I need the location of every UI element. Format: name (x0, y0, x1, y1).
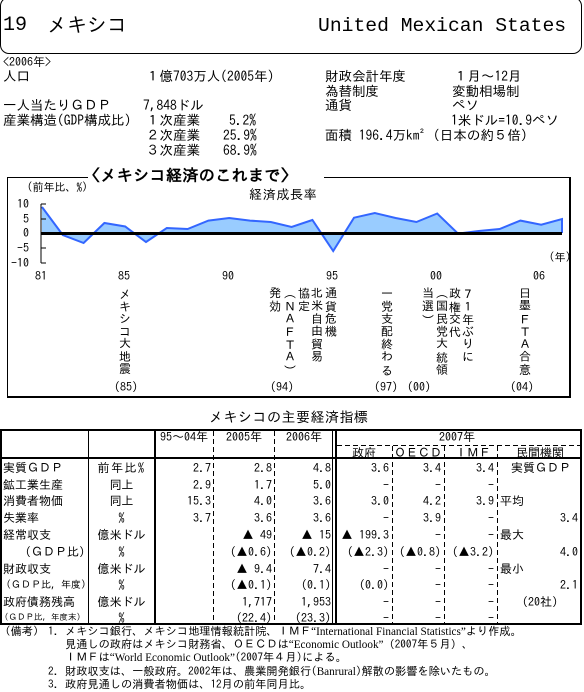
basic data block: 変動相場制 (452, 84, 520, 98)
event: 2000 change of government: ７１年ぶりに (462, 287, 474, 363)
row: real GDP: 3.6 (371, 462, 389, 474)
row: real GDP: 2.8 (254, 462, 272, 474)
footnotes: メキシコ銀行、メキシコ地理情報統計院、ＩＭＦ“International Financial Statistics”より作成。 (65, 626, 522, 638)
event: 2000 change of government: 政権交代 (449, 287, 461, 338)
table header: 2006年 (286, 431, 322, 443)
row: mining and manufacturing output: - (488, 479, 494, 491)
event: 2000 change of government (407, 287, 474, 393)
event: 2004 Japan-Mexico FTA: (04) (510, 381, 534, 393)
footnotes: 見通しの政府はメキシコ財務省、ＯＥＣＤは“Economic Outlook”（2007年５月）、 (65, 639, 473, 651)
row: government debt to GDP: (22.4) (236, 612, 272, 624)
footnotes: 財政収支は、一般政府。2002年は、農業開発銀行(Banrural)解散の影響を除いたもの。 (65, 666, 496, 678)
footnotes (5, 626, 522, 690)
row: government debt: 1,953 (301, 596, 331, 608)
row: unemployment: 3.6 (313, 512, 331, 524)
row: unemployment: 失業率 (3, 512, 39, 524)
currency: 通貨 (325, 98, 352, 112)
row: fiscal balance to GDP: (▲0.1) (230, 579, 272, 591)
industry structure: 産業構造(GDP構成比) (3, 113, 131, 127)
row: fiscal balance to GDP: 2.1 (560, 579, 578, 591)
row: real GDP: 前年比% (98, 462, 146, 474)
row: government debt to GDP (0, 612, 494, 624)
row: current account: ▲ 49 (242, 529, 272, 541)
exchange rate system: 為替制度 (325, 84, 379, 98)
title: English name: United Mexican States (318, 15, 566, 37)
row: consumer prices: 平均 (500, 495, 524, 507)
chart title: 経済成長率 (249, 188, 318, 201)
row: real GDP: 2.7 (193, 462, 211, 474)
row: government debt: - (488, 596, 494, 608)
row: government debt: 1,717 (242, 596, 272, 608)
event: 1994 peso crisis and NAFTA (269, 287, 337, 393)
event: 2000 change of government: (00) (407, 381, 431, 393)
row: current account to GDP: （ＧＤＰ比） (19, 546, 91, 558)
growth line (42, 207, 562, 251)
y axis labels: 0 (23, 227, 29, 239)
event: 2004 Japan-Mexico FTA (510, 287, 534, 393)
table header: 95〜04年 (160, 431, 208, 443)
footnotes: (備考) (5, 626, 39, 637)
x axis labels: 85 (118, 270, 130, 282)
row: government debt (3, 596, 558, 608)
row: fiscal balance to GDP: - (435, 579, 441, 591)
population: 人口 (3, 69, 30, 83)
row: fiscal balance to GDP (1, 579, 578, 591)
chart heading: 〈メキシコ経済のこれまで〉 (84, 167, 297, 183)
row: current account to GDP: (▲0.8) (399, 546, 441, 558)
event: 1997 end of one-party rule: 一党支配終わる (381, 287, 393, 376)
y axis (41, 204, 46, 263)
footnotes: 政府見通しの消費者物価は、12月の前年同月比。 (65, 679, 311, 690)
row: government debt: (20社) (522, 596, 558, 608)
row: fiscal balance to GDP: - (488, 579, 494, 591)
row: fiscal balance: 財政収支 (3, 563, 51, 575)
row: mining and manufacturing output: 5.0 (313, 479, 331, 491)
table header: 民間機関 (516, 447, 564, 459)
event: 2000 change of government: （国民党大統領 (436, 287, 448, 376)
table header: ＩＭＦ (455, 447, 491, 459)
row: government debt: 億米ドル (98, 596, 146, 608)
row: government debt: 政府債務残高 (3, 596, 75, 608)
event: 1985 earthquake: (85) (114, 381, 138, 393)
x axis labels: 90 (222, 270, 234, 282)
table header (160, 431, 564, 459)
row: government debt to GDP: (23.3) (295, 612, 331, 624)
basic data block: 68.9% (223, 143, 257, 157)
row: fiscal balance to GDP: (0.0) (359, 579, 389, 591)
row: mining and manufacturing output: - (383, 479, 389, 491)
row: consumer prices: 3.6 (313, 495, 331, 507)
row: current account to GDP: % (118, 546, 124, 558)
title: country number: 19 (3, 14, 27, 37)
footnotes: ＩＭＦは“World Economic Outlook”(2007年４月)による。 (65, 652, 347, 664)
row: fiscal balance to GDP: （ＧＤＰ比, 年度） (1, 580, 91, 590)
basic data block: ペソ (452, 98, 479, 112)
footnotes: 2. (48, 666, 59, 677)
row: government debt to GDP: （ＧＤＰ比, 年度末） (0, 614, 85, 622)
footnotes: 1. (48, 626, 59, 637)
row: government debt to GDP: - (383, 612, 389, 624)
event: 2004 Japan-Mexico FTA: 日墨ＦＴＡ合意 (519, 287, 531, 376)
row: real GDP: 実質ＧＤＰ (3, 462, 63, 474)
row: current account: ▲ 199.3 (341, 529, 389, 541)
basic data block: 5.2% (229, 113, 256, 127)
row: current account: 億米ドル (98, 529, 146, 541)
basic data block: １次産業 (146, 113, 200, 127)
row: fiscal balance to GDP: (0.1) (301, 579, 331, 591)
row: fiscal balance: ▲ 9.4 (236, 563, 272, 575)
y axis labels: -10 (11, 257, 29, 269)
x axis labels: 95 (326, 270, 338, 282)
basic data block: 25.9% (223, 128, 257, 142)
event: 1997 end of one-party rule (374, 287, 398, 393)
row: fiscal balance: 億米ドル (98, 563, 146, 575)
fiscal year: 財政会計年度 (325, 69, 406, 83)
row: current account to GDP: 4.0 (560, 546, 578, 558)
event: 2000 change of government: 当選） (422, 287, 434, 325)
footnotes: 3. (48, 679, 59, 690)
row: consumer prices: 3.0 (371, 495, 389, 507)
year note: <2006年> (3, 56, 51, 68)
row: real GDP: 4.8 (313, 462, 331, 474)
event: 1985 earthquake (114, 287, 138, 393)
event: 1994 peso crisis and NAFTA: (94) (270, 381, 294, 393)
row: current account to GDP: (▲2.3) (347, 546, 389, 558)
event: 1994 peso crisis and NAFTA: （ＮＡＦＴＡ） (284, 287, 296, 376)
row: consumer prices: 3.9 (476, 495, 494, 507)
row: government debt: - (383, 596, 389, 608)
row: real GDP: 3.4 (476, 462, 494, 474)
row: consumer prices: 4.0 (254, 495, 272, 507)
row: current account (3, 528, 524, 541)
row: government debt to GDP: - (488, 612, 494, 624)
row: fiscal balance: - (435, 563, 441, 575)
row: fiscal balance: 最小 (500, 563, 524, 575)
row: consumer prices: 同上 (110, 495, 134, 507)
row: current account: ▲ 15 (301, 529, 331, 541)
row: consumer prices: 15.3 (187, 495, 211, 507)
row: current account to GDP: (▲0.6) (230, 546, 272, 558)
row: real GDP: 3.4 (423, 462, 441, 474)
row: mining and manufacturing output (3, 479, 494, 491)
row: unemployment: 3.4 (560, 512, 578, 524)
x axis labels: 81 (35, 270, 47, 282)
line chart: economic growth rate (40, 204, 563, 264)
row: mining and manufacturing output: 鉱工業生産 (3, 479, 63, 491)
row: fiscal balance (3, 562, 524, 575)
row: real GDP (3, 462, 571, 474)
table title: メキシコの主要経済指標 (209, 410, 368, 424)
row: current account to GDP: (▲3.2) (452, 546, 494, 558)
y axis labels (11, 198, 29, 269)
row: current account: 経常収支 (3, 529, 51, 541)
event: 1997 end of one-party rule: (97) (374, 381, 398, 393)
event: 1994 peso crisis and NAFTA: 協定 (298, 287, 310, 312)
row: government debt: - (435, 596, 441, 608)
x axis labels: 06 (533, 270, 545, 282)
row: real GDP: 実質ＧＤＰ (511, 462, 571, 474)
row: current account: - (488, 529, 494, 541)
x axis labels: 00 (430, 270, 442, 282)
area: 面積 196.4万km²（日本の約５倍） (325, 128, 534, 142)
row: fiscal balance: - (383, 563, 389, 575)
x axis unit: (年) (549, 252, 571, 263)
row: unemployment (3, 512, 578, 524)
basic data block: 7,848ドル (143, 98, 204, 112)
row: current account to GDP: (▲0.2) (289, 546, 331, 558)
row: unemployment: - (488, 512, 494, 524)
row: fiscal balance: 7.4 (313, 563, 331, 575)
row: mining and manufacturing output: 1.7 (254, 479, 272, 491)
event: 1994 peso crisis and NAFTA: 北米自由貿易 (311, 287, 323, 363)
row: mining and manufacturing output: - (435, 479, 441, 491)
table header: 2005年 (226, 431, 262, 443)
row: consumer prices: 消費者物価 (3, 495, 63, 507)
table header: 政府 (352, 447, 376, 459)
header box (0, 0, 582, 54)
row: current account: - (435, 529, 441, 541)
y axis unit: (前年比、%) (27, 182, 88, 193)
row: unemployment: 3.6 (254, 512, 272, 524)
title: Japanese name: メキシコ (47, 15, 127, 35)
row: current account to GDP (19, 546, 578, 558)
event: 1985 earthquake: メキシコ大地震 (119, 287, 131, 376)
event: 1994 peso crisis and NAFTA: 発効 (269, 287, 281, 312)
row: fiscal balance: - (488, 563, 494, 575)
row: unemployment: 3.9 (423, 512, 441, 524)
event: 1994 peso crisis and NAFTA: 通貨危機 (325, 287, 337, 338)
basic data block: ３次産業 (146, 143, 200, 157)
row: current account: 最大 (500, 529, 524, 541)
row: fiscal balance to GDP: % (118, 579, 124, 591)
row: government debt to GDP: % (118, 612, 124, 624)
row: government debt to GDP: - (435, 612, 441, 624)
zero line (41, 232, 562, 235)
growth area fill (42, 207, 562, 251)
y axis labels: 10 (17, 198, 29, 210)
row: unemployment: - (383, 512, 389, 524)
row: unemployment: % (118, 512, 124, 524)
row: unemployment: 3.7 (193, 512, 211, 524)
y axis labels: 5 (23, 213, 29, 225)
basic data block: １億703万人(2005年) (146, 69, 274, 83)
basic data block: １月〜12月 (454, 69, 522, 83)
row: mining and manufacturing output: 同上 (110, 479, 134, 491)
y axis labels: -5 (17, 242, 29, 254)
row: mining and manufacturing output: 2.9 (193, 479, 211, 491)
basic data block (3, 56, 559, 157)
row: consumer prices (3, 495, 524, 507)
basic data block: 1米ドル=10.9ペソ (451, 113, 559, 127)
table header: ＯＥＣＤ (394, 447, 442, 459)
table header: 2007年 (439, 431, 475, 443)
basic data block: ２次産業 (146, 128, 200, 142)
row: consumer prices: 4.2 (423, 495, 441, 507)
GDP per capita: 一人当たりＧＤＰ (3, 98, 111, 112)
x axis labels (35, 270, 545, 282)
